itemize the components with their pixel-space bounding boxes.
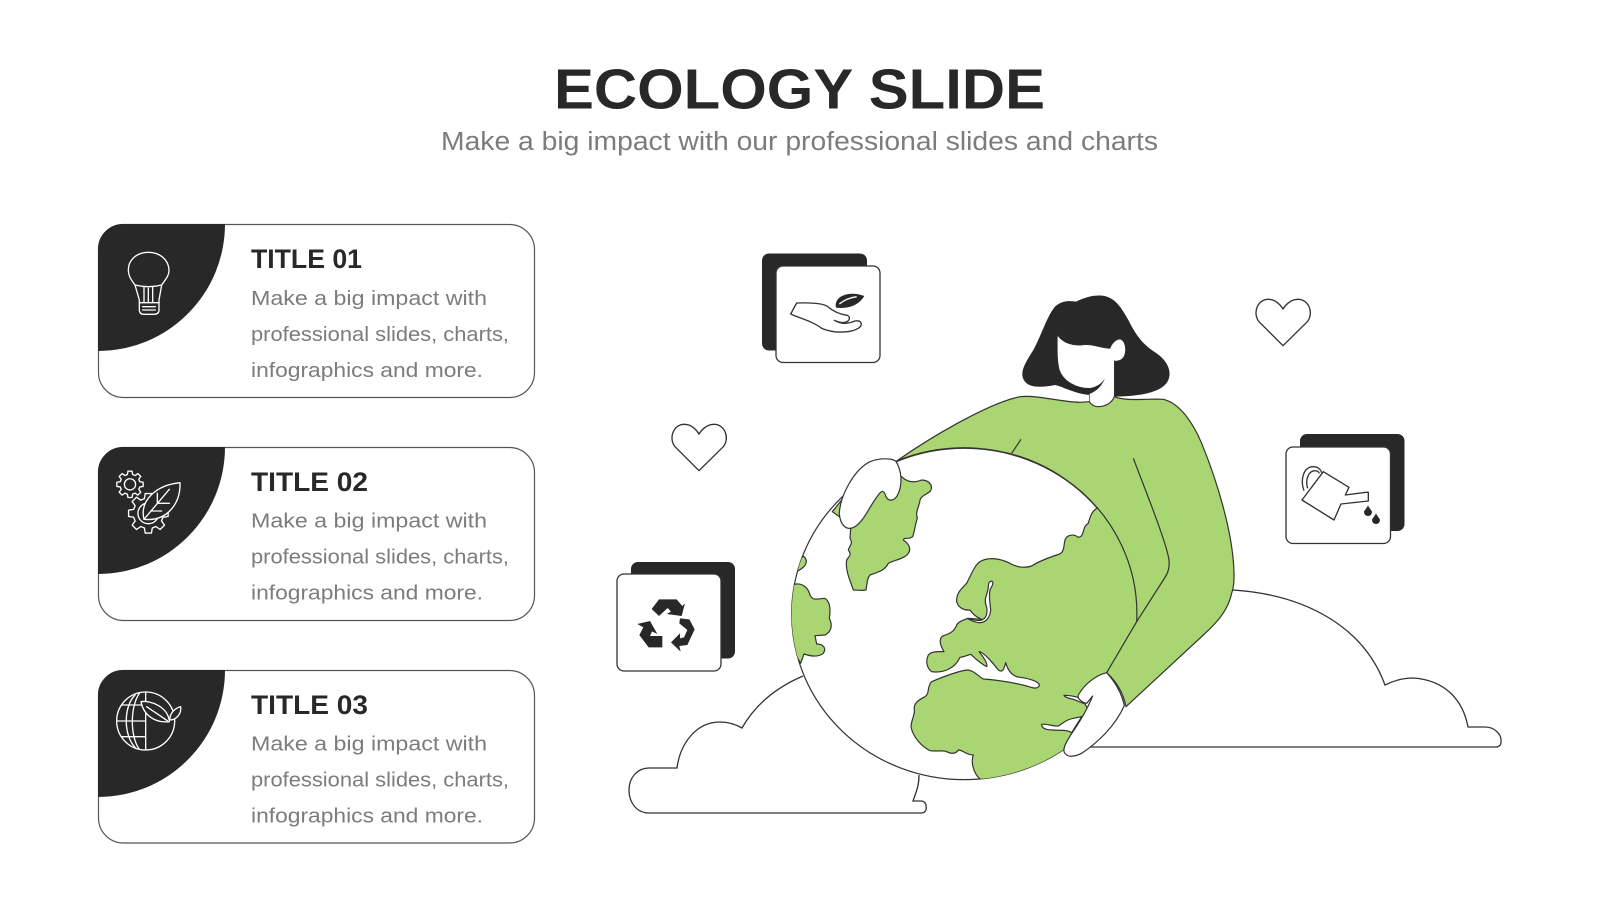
text block: title 01 description: Make a big impact with	[251, 287, 487, 310]
subtitle: Make a big impact with our professional slides and charts	[441, 128, 1158, 156]
cloud: left	[629, 676, 926, 813]
text block: title 03 description	[251, 732, 509, 828]
icon card: hand holding leaf	[762, 254, 880, 362]
icon: globe and leaf	[117, 692, 181, 750]
continents	[792, 476, 1136, 779]
text block: title 02 description: infographics and more.	[251, 582, 483, 604]
text block: title 01 description	[251, 287, 509, 382]
chin shadow	[1089, 378, 1105, 394]
icon: heart left	[672, 424, 726, 471]
heading: title 01: TITLE 01	[251, 244, 362, 274]
text block: title 03 description: infographics and more.	[251, 804, 483, 828]
heading: title 02: TITLE 02	[251, 467, 368, 497]
lower hand	[1064, 673, 1124, 756]
sweater fold lines	[1012, 439, 1169, 622]
icon: heart right	[1256, 299, 1310, 346]
sweater	[897, 396, 1234, 707]
title: ECOLOGY SLIDE	[554, 58, 1045, 122]
upper hand	[839, 459, 901, 528]
panel: title 01 card	[98, 224, 534, 398]
globe	[792, 448, 1137, 780]
text block: title 02 description	[251, 510, 509, 604]
face and neck	[1057, 335, 1126, 407]
icon card: watering can	[1286, 434, 1404, 544]
text block: title 03 description: professional slides, charts,	[251, 768, 509, 792]
icon card: recycle	[617, 562, 735, 671]
hair	[1022, 296, 1170, 397]
text block: title 01 description: professional slides, charts,	[251, 323, 509, 346]
text block: title 01 description: infographics and more.	[251, 359, 483, 382]
panel: title 02 card	[98, 447, 534, 620]
text block: title 02 description: Make a big impact with	[251, 510, 487, 532]
cloud: right	[1085, 590, 1501, 747]
icon: light bulb	[128, 252, 169, 314]
icon: gears and leaf	[117, 471, 180, 533]
text block: title 02 description: professional slides, charts,	[251, 546, 509, 568]
illustration: person hugging globe	[787, 296, 1234, 787]
panel: title 03 card	[98, 670, 534, 843]
heading: title 03: TITLE 03	[251, 690, 368, 720]
text block: title 03 description: Make a big impact with	[251, 732, 487, 756]
